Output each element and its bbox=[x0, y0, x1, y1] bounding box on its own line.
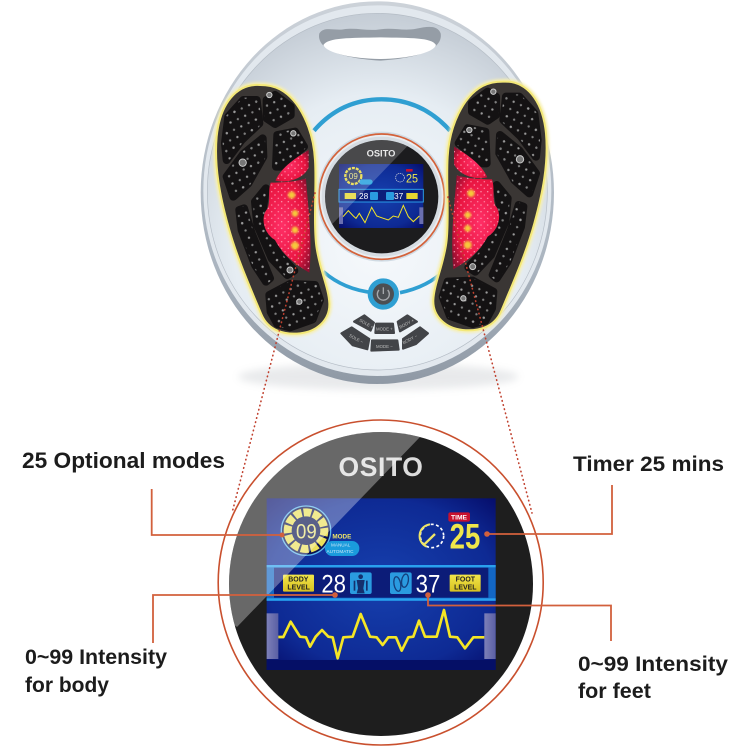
mini lcd screen: 09 bbox=[349, 172, 358, 181]
mode label: MODE bbox=[332, 534, 351, 541]
mode label bbox=[325, 534, 359, 556]
control buttons: SOLE + bbox=[359, 318, 375, 330]
body level label bbox=[283, 575, 314, 592]
body level label: BODY bbox=[288, 577, 309, 584]
callout line: modes bbox=[152, 489, 284, 538]
callout line: timer bbox=[484, 485, 612, 537]
magnified display lens bbox=[200, 420, 543, 745]
lcd bottom band bbox=[267, 660, 496, 670]
dotted zoom guide lines bbox=[232, 193, 532, 513]
label: optional modes: 25 Optional modes bbox=[22, 448, 225, 473]
left foot pads bbox=[225, 95, 320, 327]
control buttons: SOLE − bbox=[348, 333, 364, 345]
icon: feet bbox=[390, 572, 412, 594]
control buttons: MODE + bbox=[376, 327, 393, 332]
power button bbox=[368, 278, 399, 310]
timer label: TIME bbox=[451, 514, 468, 521]
mini lcd screen: 37 bbox=[394, 191, 404, 201]
icon: timer clock bbox=[420, 524, 444, 548]
label: timer: Timer 25 mins bbox=[573, 452, 724, 476]
control display bbox=[313, 133, 446, 261]
control buttons: BODY − bbox=[402, 333, 419, 345]
timer value: 25 bbox=[450, 518, 480, 557]
blue ring bottom arcs bbox=[323, 269, 446, 293]
body level label: LEVEL bbox=[287, 585, 311, 592]
label: feet intensity bbox=[578, 652, 728, 703]
blue ring top arc bbox=[314, 99, 450, 131]
icon: body figure bbox=[350, 572, 372, 594]
foot level label bbox=[450, 575, 481, 592]
left foot silver studs bbox=[239, 92, 302, 304]
right foot yellow glow outline bbox=[433, 82, 547, 330]
right foot plate bbox=[433, 82, 547, 330]
control buttons: BODY + bbox=[398, 318, 415, 330]
mini brand: OSITO bbox=[367, 149, 395, 159]
brand name: OSITO bbox=[339, 452, 423, 482]
mini lcd screen: 28 bbox=[359, 191, 369, 201]
right foot silver studs bbox=[461, 89, 524, 301]
mini lcd screen: 25 bbox=[406, 172, 418, 186]
right foot dot pattern bbox=[443, 92, 538, 324]
device shadow bbox=[238, 363, 518, 390]
control buttons bbox=[341, 315, 428, 351]
lens ring bbox=[218, 420, 543, 745]
lens black face bbox=[229, 432, 533, 736]
label: body intensity: 0~99 Intensity bbox=[25, 646, 167, 669]
waveform bbox=[278, 610, 484, 658]
mini lcd screen bbox=[339, 164, 423, 228]
right foot pads bbox=[443, 92, 538, 324]
waveform side bars bbox=[267, 613, 496, 659]
foot level value: 37 bbox=[416, 570, 440, 598]
mini display glare bbox=[325, 140, 408, 224]
label: feet intensity: 0~99 Intensity bbox=[578, 652, 728, 676]
mode label: MANUAL bbox=[331, 543, 351, 548]
label: feet intensity: for feet bbox=[578, 679, 651, 703]
label: body intensity bbox=[25, 646, 167, 697]
right foot red light zones bbox=[452, 147, 499, 269]
left foot red light zones bbox=[264, 150, 310, 273]
callout line: feet intensity bbox=[425, 592, 611, 641]
left foot yellow glow outline bbox=[216, 85, 329, 334]
control buttons: MODE − bbox=[376, 344, 393, 349]
foot level label: FOOT bbox=[456, 577, 476, 584]
left foot plate bbox=[216, 85, 329, 334]
callout line: body intensity bbox=[153, 592, 338, 643]
mode number: 09 bbox=[296, 519, 317, 543]
lcd screen bbox=[267, 498, 496, 670]
timer label bbox=[448, 512, 470, 522]
carry handle bbox=[319, 27, 441, 61]
level strip bbox=[267, 565, 496, 601]
label: body intensity: for body bbox=[25, 674, 109, 697]
device body bbox=[201, 1, 554, 384]
left foot dot pattern bbox=[225, 95, 320, 327]
mode gauge bbox=[281, 506, 331, 555]
mode label: AUTOMATIC bbox=[326, 549, 354, 554]
lens glare bbox=[229, 432, 420, 627]
body level value: 28 bbox=[321, 570, 346, 598]
foot level label: LEVEL bbox=[454, 585, 477, 592]
lcd background bbox=[267, 498, 496, 670]
device: foot massager bbox=[201, 1, 554, 390]
